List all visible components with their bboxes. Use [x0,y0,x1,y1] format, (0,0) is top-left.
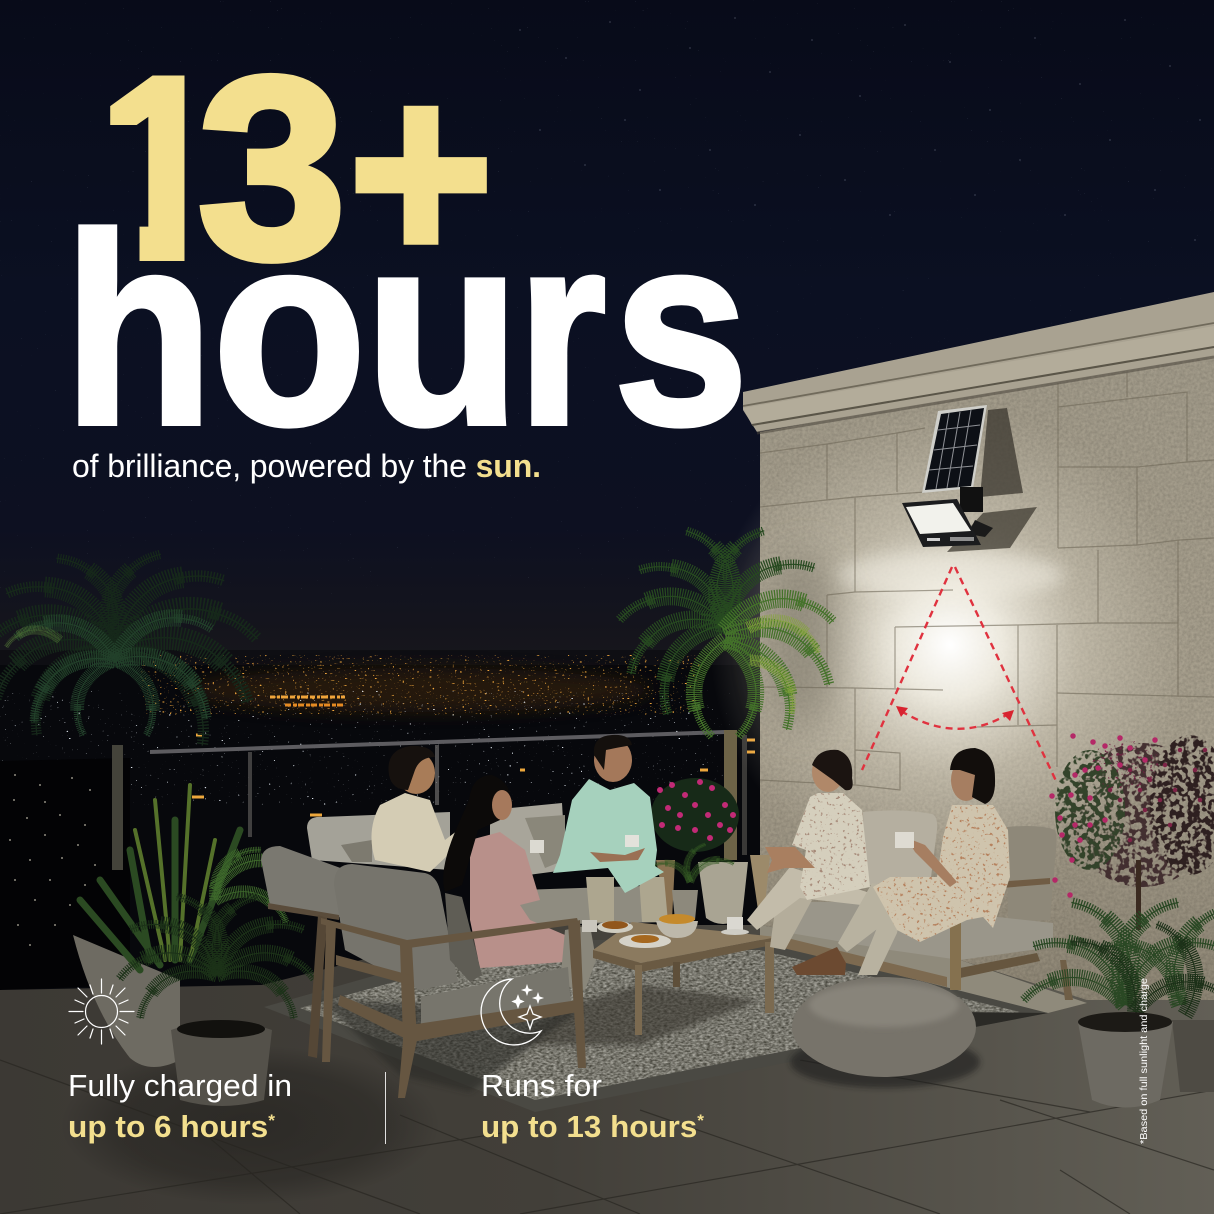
headline number: 3 [198,23,346,312]
palm tree centre [619,522,841,860]
wall with stone blocks [710,350,1214,1010]
stat: charge time: Fully charged in [68,1068,292,1103]
headline word: r [518,180,606,481]
coffee table with plates [582,914,777,1035]
back sofa [307,803,675,925]
pouf [790,977,980,1088]
person: man in cream kurta [371,746,458,872]
stat: charge time [68,1068,292,1144]
headline number: 1 [98,23,226,312]
icon: solar lamp with panel [902,405,1037,552]
far-left dark terrace wall with distant lights [0,758,130,990]
glass railing [150,730,747,855]
divider [385,1072,386,1144]
stat: run time: * [697,1111,704,1130]
stat: charge time: up to 6 hours [68,1109,264,1144]
fern plants in pots right [1023,890,1214,1108]
headline word: h [64,180,213,481]
person: man in mint kurta [553,735,668,922]
headline number [110,72,487,264]
dark pot left [171,1020,272,1106]
city lights skyline [0,650,760,995]
footnote: *Based on full sunlight and charge [1138,978,1150,1144]
right sofa [750,810,1073,1000]
wall cornice [743,292,1214,433]
stat: run time: Runs for [481,1068,602,1103]
headline word: s [614,180,748,481]
potted snake plant and fern [80,785,315,1019]
person: woman in pink with long hair [443,775,596,990]
person: woman in floral tunic right [792,748,1010,975]
headline word: u [365,180,520,481]
patterned rug [264,940,1048,1112]
bougainvillea flower plant right [1052,735,1214,930]
headline number: + [349,27,493,316]
subheading: of brilliance, powered by the sun. [72,448,541,484]
terrace floor [0,925,1214,1214]
front left armchair [261,846,346,1058]
headline word: o [213,180,366,481]
stat: run time: up to 13 hours [481,1109,695,1144]
icon: sun [69,979,134,1044]
stat: charge time: * [268,1111,275,1130]
stat: run time [481,1068,704,1144]
light beam dashed red lines with arc arrow [862,567,1057,783]
pots behind [73,862,748,1067]
palm tree left [0,544,259,870]
stars [0,0,1214,600]
person: woman in floral top left [747,750,870,950]
front armchair with wood frame [321,864,586,1098]
flower plant centre [651,778,739,920]
icon: moon and stars [481,979,542,1045]
